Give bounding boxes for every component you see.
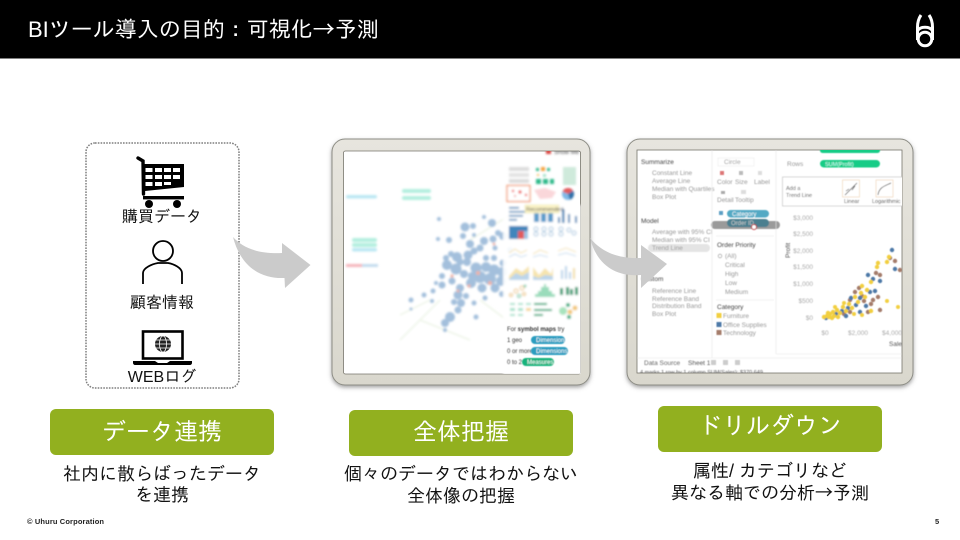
- title: BIツール導入の目的：可視化→予測: [28, 12, 379, 44]
- marks card: Order ID: [731, 221, 755, 227]
- y axis title: Profit: [785, 243, 792, 258]
- page number: 5: [935, 517, 939, 526]
- symbol map bubbles: [408, 215, 513, 332]
- hint: measures: [507, 358, 554, 366]
- analytics pane: Model: [641, 218, 659, 225]
- filter: order priority: High: [725, 271, 739, 278]
- show me button: [544, 151, 580, 156]
- y axis: $0: [806, 315, 813, 322]
- chart thumbnail: tables: [509, 167, 529, 183]
- y axis: $1,500: [793, 264, 813, 271]
- step 2 description: 個々のデータではわからない: [344, 464, 578, 484]
- analytics pane: Reference Band: [652, 296, 699, 303]
- legend: category: Office Supplies: [723, 322, 767, 329]
- hint: geo dimension: 1 geo: [507, 338, 523, 344]
- step 3 description: 異なる軸での分析→予測: [671, 479, 869, 505]
- panel: overview screenshot: [332, 139, 590, 385]
- legend: category: Technology: [723, 330, 757, 337]
- chart thumbnail: selected symbol map: [507, 186, 530, 202]
- chart thumbnail: box plots: [560, 287, 578, 295]
- hint: dimensions: [507, 347, 568, 355]
- shelves: Rows: [787, 161, 804, 168]
- recommended tooltip: Recommended: [526, 207, 563, 213]
- scatter points: office supplies: [824, 248, 897, 320]
- y axis: $2,500: [793, 231, 813, 238]
- step 3: drill down: [658, 406, 882, 452]
- chart thumbnail: horizontal bars: [509, 207, 527, 221]
- symbol map hint text: For symbol maps try: [507, 327, 564, 333]
- status bar: 4 marks 1 row by 1 column SUM(Sales): $370,649: [640, 370, 763, 376]
- chart thumbnail: heatmap: [536, 167, 554, 184]
- chart thumbnail: scatter: [509, 285, 526, 298]
- chart thumbnail: filled map: [534, 188, 556, 199]
- chart thumbnail: packed bubbles: [559, 303, 578, 319]
- shelves: SUM(Profit): [825, 162, 854, 168]
- step 2: overall understanding: [349, 410, 573, 456]
- view divider lines: [637, 150, 902, 358]
- label: purchase data: 購買データ: [122, 208, 202, 226]
- y axis: $2,000: [793, 248, 813, 255]
- step 1 description: 社内に散らばったデータ: [63, 464, 261, 484]
- x axis: $2,000: [848, 330, 868, 337]
- marks card: Label: [754, 179, 770, 186]
- analytics pane: Trend Line: [652, 245, 683, 252]
- hint: geo dimension: [507, 336, 565, 344]
- analytics pane: Distribution Band: [652, 303, 702, 310]
- y axis: $1,000: [793, 281, 813, 288]
- chart thumbnails: line charts: [509, 248, 576, 257]
- chart picker panel: [503, 205, 581, 375]
- step 3 description: 属性/ カテゴリなど: [693, 461, 847, 481]
- sheet tabs: Data Source: [644, 360, 681, 367]
- panel: drill-down screenshot: [627, 139, 913, 385]
- trend line card: Trend Line: [786, 193, 812, 199]
- legend: category: Furniture: [723, 313, 749, 320]
- trend line card: [782, 177, 904, 206]
- marks card: [711, 158, 780, 230]
- chart thumbnail: stacked bars: [534, 213, 553, 222]
- hint: measures: Measures: [527, 360, 553, 366]
- analytics pane: Median with 95% CI: [652, 237, 710, 244]
- icon: Uhuru logo: [918, 15, 932, 46]
- marks card: Category: [732, 212, 756, 218]
- chart thumbnail: gantt table: [510, 303, 531, 316]
- step 1 description: [63, 464, 261, 505]
- trend line card: Linear: [844, 199, 859, 205]
- symbol map hint text: [507, 327, 568, 366]
- filter: order priority: Critical: [725, 262, 745, 269]
- marks card: Detail: [717, 197, 734, 204]
- step 1 description: を連携: [135, 485, 189, 505]
- trend line card: Logarithmic: [872, 199, 901, 205]
- chart thumbnail: highlight table: [563, 167, 576, 185]
- label: customer info: 顧客情報: [130, 295, 194, 312]
- analytics pane: Summarize: [641, 159, 674, 166]
- map highlighted points: [450, 243, 495, 292]
- icon: shopping cart: [138, 158, 184, 208]
- chart thumbnail: side by side bars: [558, 209, 577, 223]
- chart thumbnail: treemap: [509, 226, 528, 239]
- analytics pane: Custom: [641, 276, 663, 283]
- y axis: $500: [799, 298, 813, 305]
- footer copyright: © Uhuru Corporation: [27, 517, 104, 526]
- filter: order priority: (All): [725, 253, 737, 260]
- y axis: $3,000: [793, 215, 813, 222]
- marks card: Circle: [724, 159, 741, 166]
- screenshot: Tableau scatter view: [637, 148, 906, 376]
- step 1: data integration: データ連携: [102, 419, 222, 446]
- filter: order priority: Low: [725, 280, 737, 287]
- shelves: [787, 148, 880, 168]
- left filter pills: [346, 189, 431, 267]
- analytics pane: Reference Line: [652, 288, 696, 295]
- chart thumbnail: pie: [562, 188, 574, 200]
- label: web log: WEBログ: [128, 368, 196, 386]
- x axis: [821, 330, 902, 337]
- chart thumbnail: histogram: [535, 284, 555, 297]
- filter: order priority: Medium: [725, 289, 748, 296]
- step 3 description: [671, 461, 869, 505]
- map faint routes: [400, 220, 502, 340]
- filter: order priority: [717, 242, 756, 296]
- screenshot: symbol map with chart picker: [346, 150, 581, 375]
- step 2 description: 全体像の把握: [407, 486, 515, 506]
- step 1: data integration: [50, 409, 274, 455]
- step 2 description: [344, 464, 578, 506]
- arrow: data to overview: [233, 237, 310, 288]
- analytics pane: Median with Quartiles: [652, 186, 715, 193]
- sheet tabs: Sheet 1: [688, 360, 711, 367]
- hint: dimensions: 0 or more: [507, 349, 533, 355]
- analytics pane: [641, 159, 715, 318]
- legend: category: Category: [717, 304, 744, 311]
- analytics pane: Box Plot: [652, 194, 676, 201]
- step 2: overall understanding: 全体把握: [413, 419, 509, 446]
- show me button: Show Me: [554, 150, 580, 156]
- chart thumbnail: bullet bars: [534, 303, 552, 316]
- icon: person: [143, 241, 182, 284]
- icon: laptop with globe: [133, 332, 192, 365]
- scatter points: technology: [842, 256, 902, 316]
- header bar: [0, 0, 960, 58]
- step 3: drill down: ドリルダウン: [698, 413, 842, 440]
- trend line card: Add a: [786, 186, 801, 192]
- hint: geo dimension: Dimension: [536, 338, 564, 344]
- marks card: Size: [735, 179, 748, 186]
- chart thumbnail: circle views: [534, 227, 576, 236]
- hint: dimensions: Dimensions: [536, 349, 567, 355]
- x axis: $4,000: [882, 330, 902, 337]
- analytics pane: Average Line: [652, 178, 691, 185]
- marks card: Tooltip: [735, 197, 754, 204]
- analytics pane: Average with 95% CI: [652, 229, 713, 236]
- analytics pane: Constant Line: [652, 170, 692, 177]
- y axis: [793, 215, 813, 322]
- x axis: $0: [821, 330, 829, 337]
- chart thumbnails: area charts: [509, 266, 575, 280]
- marks card: Color: [717, 179, 733, 186]
- filter: order priority: Order Priority: [717, 242, 756, 249]
- legend: category: [716, 304, 767, 337]
- arrow: overview to drill-down: [590, 238, 667, 288]
- analytics pane: Box Plot: [652, 311, 676, 318]
- sheet tabs: [644, 360, 740, 367]
- hint: measures: 0 to 2: [507, 360, 523, 366]
- panel: data sources: [86, 143, 239, 388]
- scatter points: furniture: [822, 255, 900, 320]
- x axis title: Sales: [889, 341, 906, 348]
